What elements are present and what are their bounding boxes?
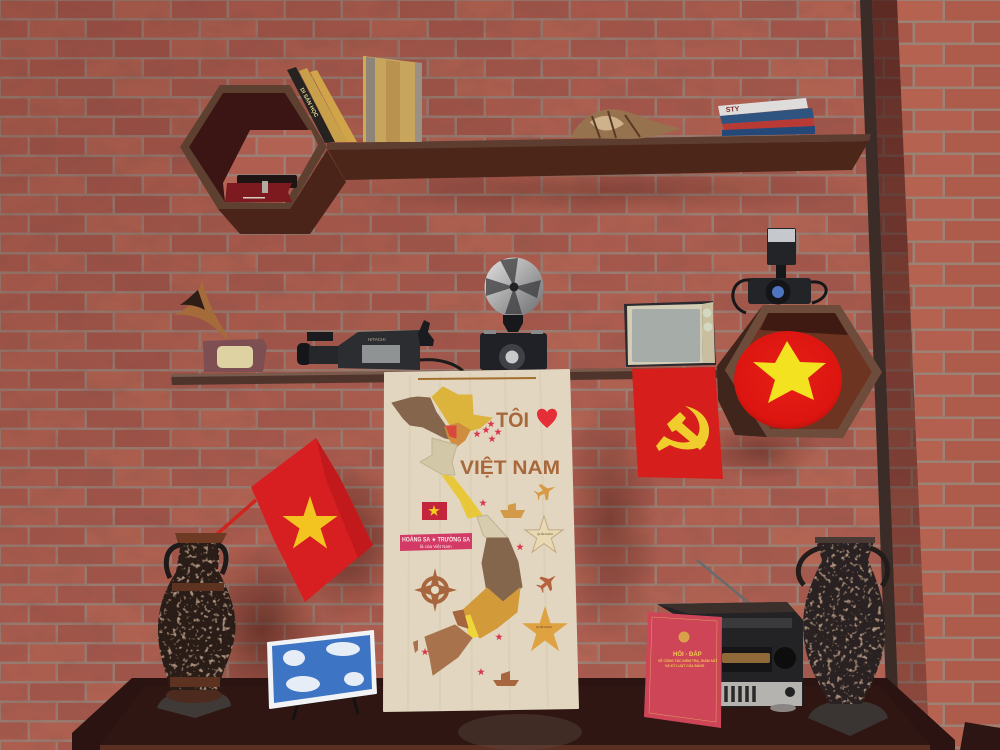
heading text: VIỆT NAM [460,457,560,479]
top long shelf [327,134,871,180]
middle long shelf [171,367,725,385]
flash camera on hexagon [733,228,826,313]
camera with flash bulb reflector [480,258,547,370]
pink booklet: VÀ KỶ LUẬT CỦA ĐẢNG [665,663,705,668]
right bronze vase [798,537,888,736]
heart [537,409,557,428]
books leaning on top shelf: DI SẢN HỌC [298,87,320,119]
big orange star: QUẦN ĐẢO [536,624,553,629]
big pale star [525,516,563,552]
pink booklet [644,612,722,728]
white flowers on plate [283,642,364,692]
radio cassette player [657,560,803,712]
pink booklet: HỎI - ĐÁP [673,651,702,658]
stack of books right: STY [726,106,740,114]
left bronze vase [157,533,236,718]
video camera: HITACHI [368,337,386,342]
waving Vietnamese flag [216,438,373,602]
compass rose [414,568,457,612]
pink booklet: VỀ CÔNG TÁC KIỂM TRA, GIÁM SÁT [658,658,718,663]
map board [384,370,578,711]
right brick wall and corner pillar [860,0,1000,750]
sea shell [571,109,682,139]
communist party flag [632,367,723,479]
hexagon shelf left [180,85,346,234]
heading text: TÔI [496,408,529,432]
big orange star [522,606,568,651]
airplanes [532,479,561,596]
hammer and sickle [656,406,709,451]
small flag on board [422,502,447,520]
boats [493,503,525,686]
hexagon shelf right [717,305,882,438]
Hoang Sa Truong Sa sign: HOÀNG SA ★ TRƯỜNG SA [402,536,471,544]
books leaning on top shelf [287,67,357,143]
stack of books right [718,98,815,136]
table top [72,678,1000,750]
gramophone on shelf [172,280,267,372]
red island stars [421,420,524,675]
red woven tray with yellow star [734,331,842,429]
Vietnam map regions [392,387,522,675]
Hoang Sa Truong Sa sign [400,533,472,551]
mini television [624,301,716,367]
blue white plate [268,631,376,720]
turntable in hexagon [225,175,297,202]
big pale star: QUẦN ĐẢO [537,531,554,536]
Hoang Sa Truong Sa sign: là của Việt Nam [420,543,452,549]
book with open pages [363,56,422,142]
video camera [297,320,463,371]
